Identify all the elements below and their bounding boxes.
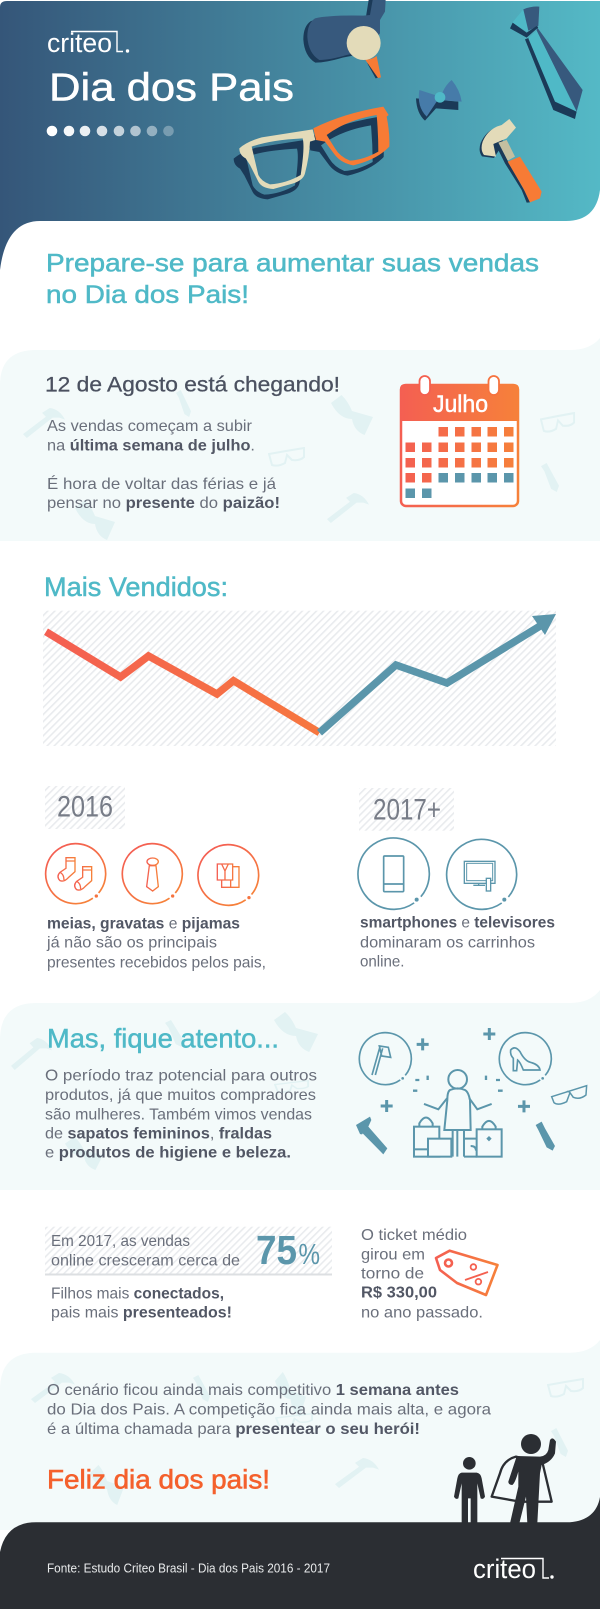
year label 2017 [359,788,454,831]
text: ticket medio: no ano passado. [361,1304,483,1321]
year label 2016: 2016 [57,791,113,824]
text: filhos conectados: pais mais presenteados! [51,1305,232,1322]
body text: O período traz potencial para outros [45,1068,317,1085]
text: ticket medio: O ticket médio [361,1227,467,1244]
column: 2016 [34,786,271,972]
stat: 75 percent: 75 [256,1227,297,1273]
icon: calendar [400,376,519,506]
body text: na última semana de julho. [47,438,255,455]
year label 2017: 2017+ [373,793,441,826]
body text: do Dia dos Pais. A competição fica ainda mais alta, e agora [47,1401,491,1418]
illustration: shopper [349,1022,587,1157]
body text: produtos, já que muitos compradores [45,1087,316,1104]
panel: header [0,0,600,270]
stat: 75 percent: online cresceram cerca de [51,1252,240,1269]
text 2017: dominaram os carrinhos [360,934,535,951]
icon: glasses [234,107,389,199]
body text [47,418,280,512]
logo: criteo footer: criteo [473,1554,536,1584]
icon: bow tie [416,80,462,121]
text: ticket medio: R$ 330,00 [361,1284,437,1301]
body text [45,1068,317,1162]
text 2016: já não são os principais [46,935,217,952]
body text: É hora de voltar das férias e já [47,474,276,493]
father with cape [492,1434,556,1523]
body text: são mulheres. Também vimos vendas [45,1106,312,1123]
icon: calendar: Julho [433,391,488,418]
stat: 75 percent: % [298,1239,320,1271]
text 2017: smartphones e televisores [360,915,555,932]
closing heading: Feliz dia dos pais! [47,1464,270,1494]
text 2016: meias, gravatas e pijamas [47,915,240,932]
body text: O cenário ficou ainda mais competitivo 1 semana antes [47,1382,459,1399]
icon: smartphone [344,824,443,923]
icon: small glasses [552,1086,587,1104]
heading: mais vendidos: Mais Vendidos: [44,572,228,602]
icon: toothbrush circle [349,1022,422,1095]
icon: small tie [536,1122,555,1151]
text: filhos conectados: Filhos mais conectados, [51,1285,224,1302]
column: 2017 [344,788,555,971]
subheading: 12 de Agosto está chegando! [45,374,340,397]
plus signs [381,1028,530,1112]
icon: golf club [303,0,386,78]
footer [0,1497,600,1609]
arrow head [532,614,556,635]
icon: necktie [510,7,583,119]
body text: de sapatos femininos, fraldas [45,1125,272,1142]
text 2016: presentes recebidos pelos pais, [47,955,266,972]
icon: television [433,826,530,923]
body text [47,1382,491,1438]
stat: 75 percent [45,1227,332,1276]
text: ticket medio: torno de [361,1266,424,1283]
icon: hammer [480,119,542,203]
icon: socks [34,832,117,915]
year label 2016 [45,786,125,829]
text 2016 [46,915,266,972]
heading: prepare-se [46,250,539,309]
body text: é a última chamada para presentear o seu herói! [47,1421,420,1438]
text 2017 [360,915,555,971]
body text: pensar no presente do paizão! [47,495,280,512]
text: ticket medio: girou em [361,1246,425,1263]
icon: shoe circle [489,1022,562,1095]
panel: cenario [0,1340,600,1530]
child [454,1457,485,1523]
illustration: father and son [454,1434,556,1523]
panel: mas fique atento [0,990,600,1190]
body text: e produtos de higiene e beleza. [45,1145,291,1162]
line chart [43,611,556,746]
title: Dia dos Pais [49,67,294,110]
icon: tie [111,832,194,915]
text 2017: online. [360,954,404,971]
logo: criteo: criteo [47,28,112,58]
text: filhos conectados [51,1285,232,1322]
body text: As vendas começam a subir [47,418,253,435]
shopping bags [414,1117,502,1157]
source: Fonte: Estudo Criteo Brasil - Dia dos Pais 2016 - 2017 [47,1561,330,1575]
panel: 12 de agosto [0,338,600,541]
icon: price tag [436,1251,498,1295]
stat: 75 percent: Em 2017, as vendas [51,1233,190,1250]
heading: prepare-se: no Dia dos Pais! [46,281,249,309]
progress dots [47,126,174,136]
heading: Mas, fique atento... [47,1023,279,1053]
icon: small hammer [356,1117,387,1154]
text: ticket medio [361,1227,483,1321]
icon: pajamas [186,833,271,917]
heading: prepare-se: Prepare-se para aumentar suas vendas [46,250,539,278]
woman [424,1070,492,1157]
